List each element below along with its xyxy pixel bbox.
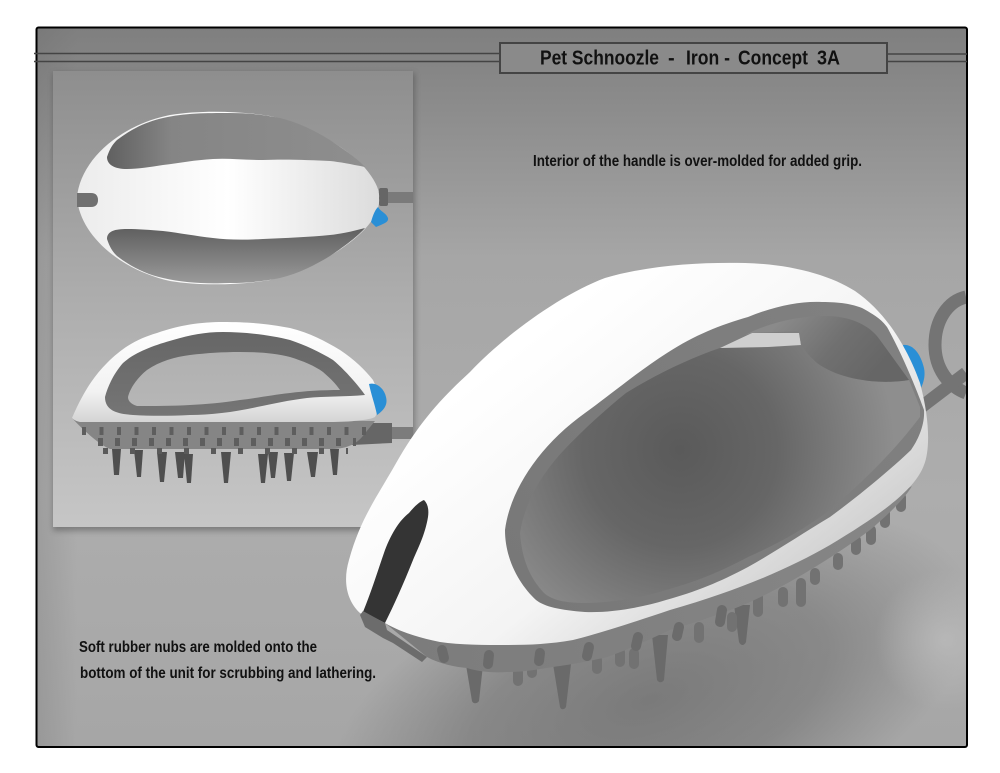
short nubs xyxy=(518,497,901,681)
icon: top view cord xyxy=(378,188,413,206)
icon: side view cord xyxy=(352,423,413,445)
title: 3A xyxy=(817,48,840,70)
callout: handle grip: Interior of the handle is over-molded for added grip. xyxy=(533,153,862,170)
title: - xyxy=(668,48,675,70)
side view of iron xyxy=(72,322,413,483)
spikes xyxy=(112,449,339,483)
title: Pet Schnoozle xyxy=(540,48,659,70)
title: Iron - xyxy=(686,48,730,70)
perspective view of iron xyxy=(346,263,966,709)
icon: cord loop xyxy=(920,297,966,408)
icon: nose slot xyxy=(363,500,428,623)
panel: orthographic views xyxy=(53,71,415,531)
icon: top view blue button xyxy=(371,207,388,227)
icon: main body shell xyxy=(346,263,928,645)
icon: nose strap xyxy=(360,611,427,662)
title: Concept xyxy=(738,48,808,70)
icon: grip rim xyxy=(505,302,924,612)
title box xyxy=(500,43,887,73)
icon: side view body xyxy=(72,322,379,422)
icon: handle interior xyxy=(520,345,920,603)
icon: window under handle xyxy=(720,333,801,348)
long spikes xyxy=(466,605,750,709)
callout: rubber nubs: bottom of the unit for scrubbing and lathering. xyxy=(80,665,376,682)
icon: blue button xyxy=(903,345,925,390)
nub rows xyxy=(82,431,372,451)
icon: handle arch xyxy=(745,316,909,382)
top view of iron xyxy=(77,112,413,284)
icon: top view slot xyxy=(77,193,98,207)
icon: rubber underside xyxy=(72,418,375,449)
icon: side view blue button xyxy=(369,384,387,415)
callout: rubber nubs: Soft rubber nubs are molded onto the xyxy=(79,639,317,656)
icon: top cavity xyxy=(107,113,365,169)
header rules xyxy=(34,54,967,62)
nubs on base xyxy=(442,610,722,664)
icon: bottom cavity xyxy=(107,228,365,283)
icon: side view handle opening xyxy=(128,352,340,406)
icon: top view body xyxy=(77,112,379,284)
icon: side view grip rim xyxy=(105,332,365,416)
icon: rubber base xyxy=(385,486,912,672)
callout: rubber nubs xyxy=(79,639,376,682)
